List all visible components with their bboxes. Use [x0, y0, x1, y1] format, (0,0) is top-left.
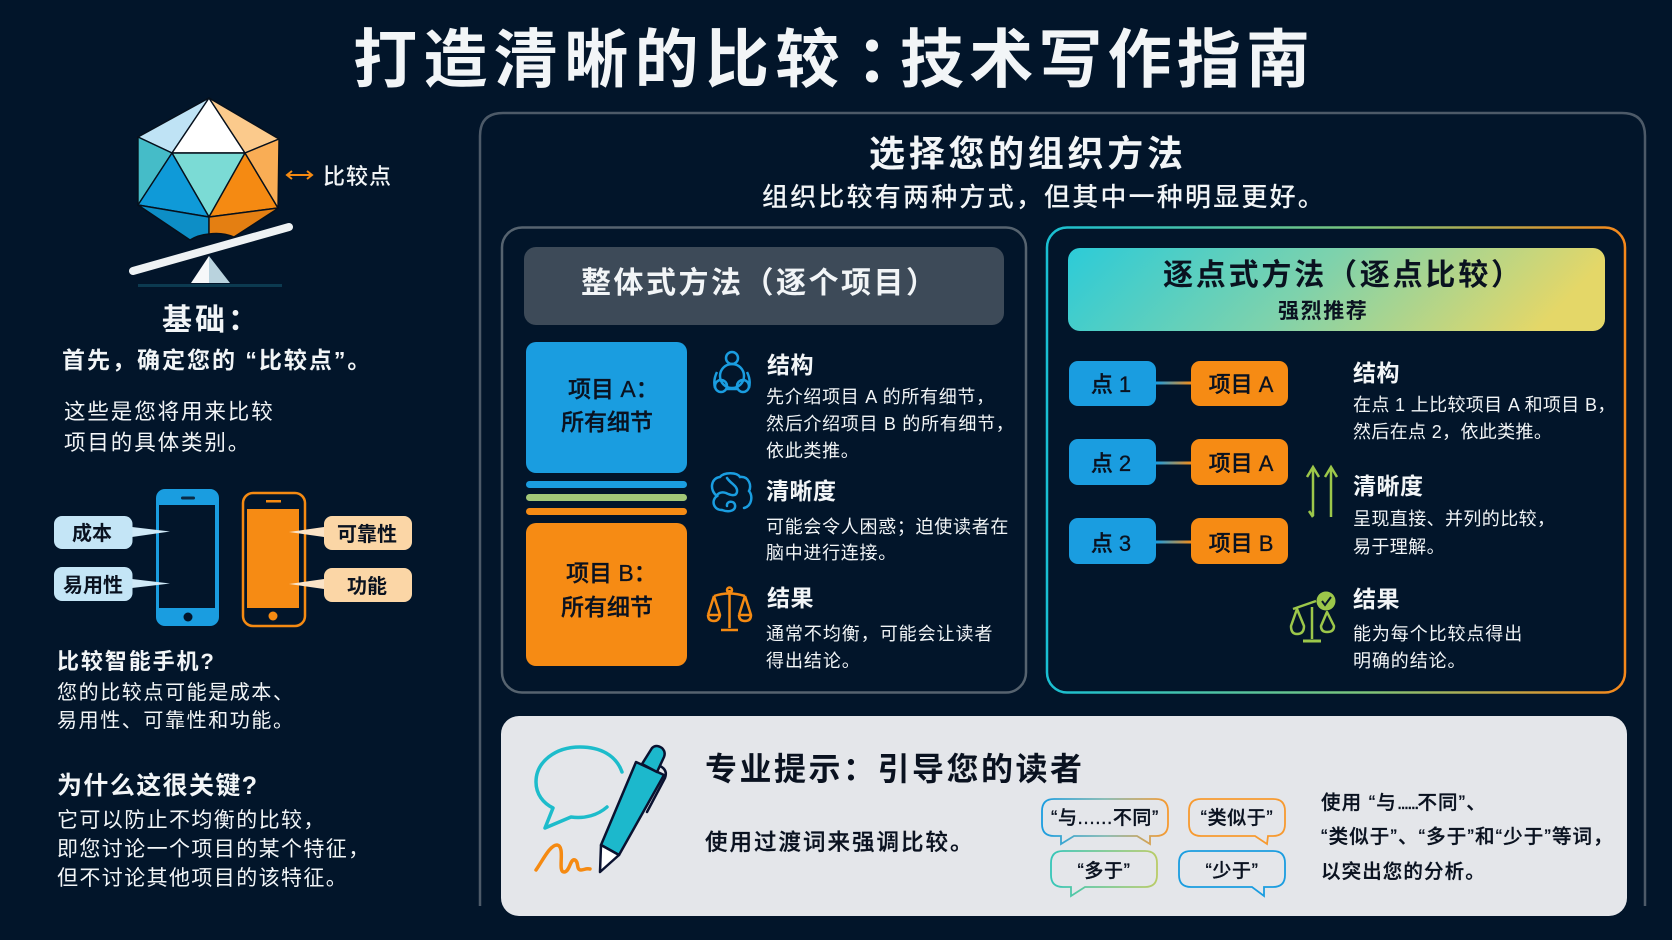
- panel: pro tip: [501, 716, 1627, 916]
- icon: blue phone with labels: [54, 489, 219, 626]
- heading: point-by-point method: [1068, 248, 1605, 331]
- text: method subtitle: 组织比较有两种方式，但其中一种明显更好。: [762, 182, 1326, 212]
- text: why it matters: 为什么这很关键?: [57, 772, 258, 800]
- title: 技术写作指南: [900, 24, 1315, 96]
- text: block clarity: 脑中进行连接。: [766, 543, 897, 563]
- text: category description: 项目的具体类别。: [64, 431, 251, 455]
- text: block clarity: [766, 478, 1009, 563]
- diagram: item A then item B: 所有细节: [561, 594, 653, 620]
- text: comparing smartphones: 比较智能手机?: [57, 649, 216, 674]
- text: point structure: [1353, 360, 1616, 442]
- icon: icosahedron on balance: [133, 98, 289, 286]
- text: block clarity: 可能会令人困惑；迫使读者在: [766, 517, 1009, 537]
- icon: green scales with check: [1291, 592, 1336, 641]
- diagram: item A then item B: 所有细节: [561, 409, 653, 435]
- arrow: comparison point pointer: [287, 171, 312, 179]
- text: why it matters: 它可以防止不均衡的比较，: [57, 809, 326, 832]
- title: ：: [856, 24, 926, 96]
- icon: structure network: [714, 352, 750, 392]
- title: 打造清晰的比较: [353, 24, 846, 96]
- panel: point-by-point method: [1047, 228, 1625, 692]
- text: point structure: 然后在点 2，依此类推。: [1353, 422, 1552, 442]
- text: point clarity: 易于理解。: [1353, 537, 1445, 557]
- text: point clarity: 呈现直接、并列的比较，: [1353, 509, 1555, 529]
- text: comparing smartphones: [57, 649, 295, 732]
- text: category description: [64, 400, 275, 455]
- callouts: transition word bubbles: “少于”: [1205, 860, 1259, 882]
- text: comparing smartphones: 易用性、可靠性和功能。: [57, 709, 295, 732]
- heading: choose your method: 选择您的组织方法: [869, 133, 1187, 174]
- diagram: points mapped to items: 项目 A: [1209, 372, 1274, 397]
- icon: confused brain: [712, 473, 751, 511]
- diagram: points mapped to items: 点 2: [1091, 451, 1131, 476]
- text: point structure: 在点 1 上比较项目 A 和项目 B，: [1353, 395, 1616, 415]
- heading: foundation: 基础：: [162, 304, 261, 337]
- heading: point-by-point method: 强烈推荐: [1278, 300, 1368, 323]
- text: block outcome: 通常不均衡，可能会让读者: [766, 624, 993, 644]
- text: block clarity: 清晰度: [766, 478, 836, 504]
- text: block structure: 然后介绍项目 B 的所有细节，: [766, 414, 1015, 434]
- label: comparison point: 比较点: [323, 164, 392, 189]
- text: block structure: 先介绍项目 A 的所有细节，: [766, 387, 995, 407]
- diagram: points mapped to items: 点 1: [1091, 372, 1131, 397]
- text: tip details: 以突出您的分析。: [1321, 861, 1486, 883]
- diagram: points mapped to items: [1069, 361, 1288, 564]
- text: why it matters: [57, 772, 371, 890]
- icon: orange phone with labels: 可靠性: [337, 523, 397, 546]
- text: tip details: 使用 “与......不同”、: [1321, 792, 1487, 814]
- text: category description: 这些是您将用来比较: [64, 400, 275, 424]
- text: point outcome: 能为每个比较点得出: [1353, 624, 1523, 644]
- text: block outcome: 得出结论。: [766, 651, 861, 671]
- heading: block method: [524, 247, 1004, 325]
- text: first step: 首先，确定您的 “比较点”。: [62, 347, 372, 373]
- text: block structure: 依此类推。: [766, 441, 860, 461]
- text: why it matters: 即您讨论一个项目的某个特征，: [57, 838, 371, 861]
- icon: blue phone with labels: 成本: [72, 521, 112, 545]
- icon: speech bubble and pen: [536, 746, 666, 872]
- text: point outcome: 结果: [1353, 586, 1400, 612]
- text: why it matters: 但不讨论其他项目的该特征。: [57, 867, 348, 890]
- text: block outcome: 结果: [767, 585, 814, 611]
- panel: foundation column: [54, 98, 412, 890]
- callouts: transition word bubbles: “与......不同”: [1051, 807, 1159, 829]
- text: block structure: [766, 352, 1015, 461]
- diagram: points mapped to items: 项目 A: [1209, 451, 1274, 476]
- icon: blue phone with labels: 易用性: [63, 574, 123, 597]
- text: transition words: 使用过渡词来强调比较。: [705, 830, 975, 855]
- heading: pro tip: 专业提示：引导您的读者: [705, 751, 1085, 787]
- text: point outcome: 明确的结论。: [1353, 651, 1466, 671]
- icon: parallel arrows: [1307, 467, 1337, 517]
- text: point outcome: [1353, 586, 1523, 671]
- callouts: transition word bubbles: “多于”: [1077, 860, 1131, 882]
- text: point clarity: 清晰度: [1353, 473, 1424, 499]
- text: tip details: [1321, 792, 1614, 883]
- text: tip details: “类似于”、“多于”和“少于”等词，: [1321, 826, 1614, 848]
- diagram: item A then item B: 项目 A：: [568, 376, 659, 402]
- callouts: transition word bubbles: [1042, 799, 1285, 896]
- diagram: points mapped to items: 项目 B: [1209, 531, 1273, 556]
- text: point clarity: [1353, 473, 1555, 557]
- panel: block method: [502, 228, 1026, 692]
- text: block structure: 结构: [767, 352, 814, 378]
- heading: block method: 整体式方法（逐个项目）: [581, 267, 938, 300]
- icon: orange phone with labels: [243, 493, 412, 626]
- heading: point-by-point method: 逐点式方法（逐点比较）: [1163, 259, 1524, 292]
- text: comparing smartphones: 您的比较点可能是成本、: [57, 681, 295, 704]
- diagram: item A then item B: [526, 342, 687, 666]
- icon: orange phone with labels: 功能: [347, 575, 387, 598]
- diagram: points mapped to items: 点 3: [1091, 531, 1131, 556]
- diagram: item A then item B: 项目 B：: [566, 560, 657, 586]
- icon: orange scales: [708, 588, 751, 630]
- callouts: transition word bubbles: “类似于”: [1201, 807, 1273, 829]
- text: block outcome: [766, 585, 993, 671]
- panel: methods frame: [480, 113, 1645, 906]
- text: point structure: 结构: [1353, 360, 1400, 386]
